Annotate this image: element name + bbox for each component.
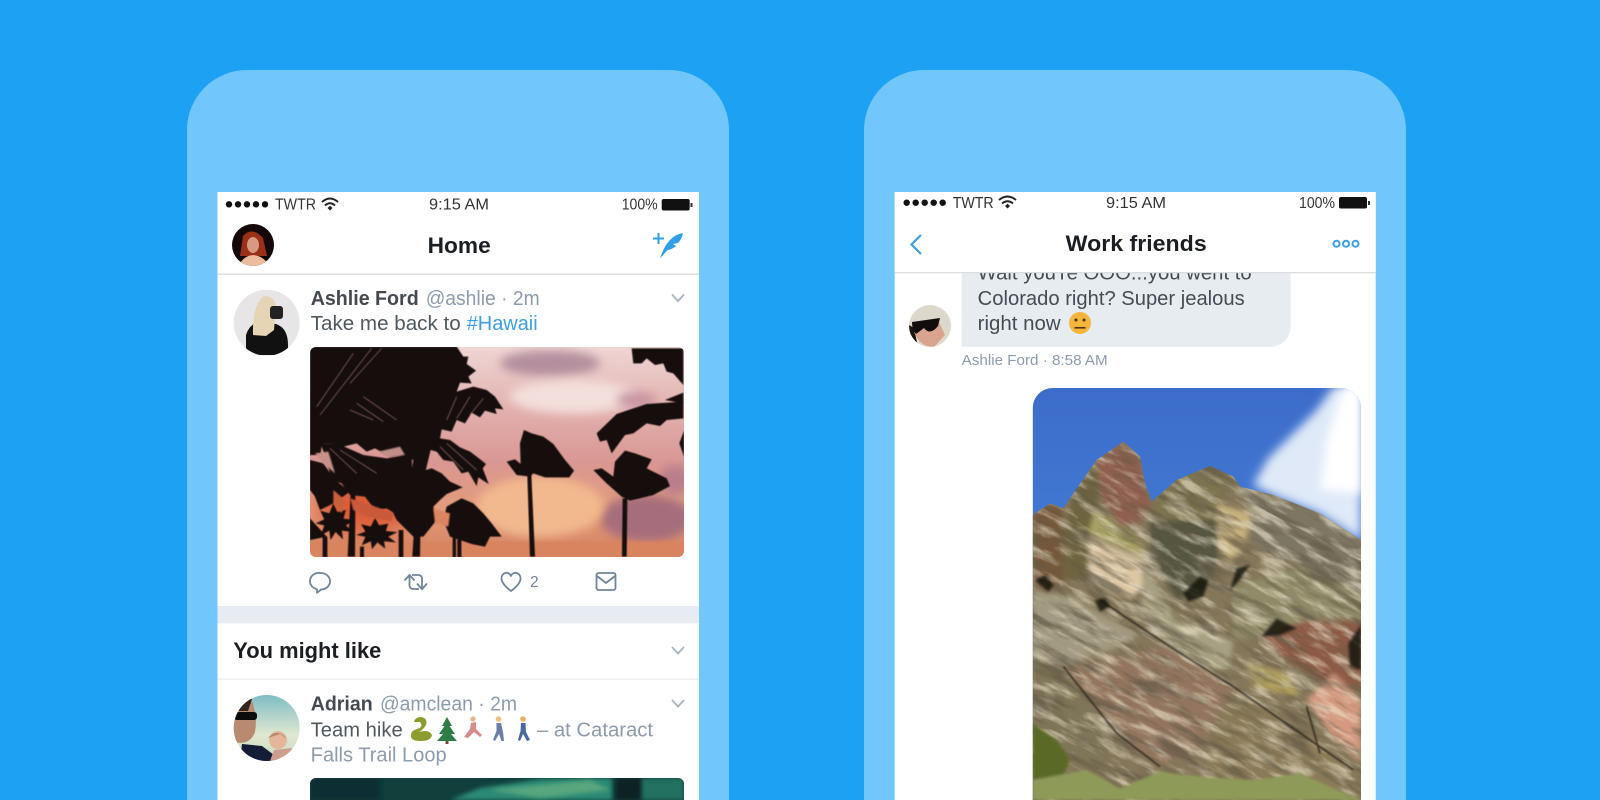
status and navigation bar: 9:15 AM <box>1106 195 1166 212</box>
status bar left <box>226 196 693 214</box>
message bubble: Colorado right? Super jealous <box>978 288 1245 310</box>
icon: compose feather <box>653 233 683 258</box>
phone: home timeline <box>187 70 729 800</box>
icon: more options <box>1334 241 1358 247</box>
status bar left: TWTR <box>275 196 316 214</box>
screen right <box>895 192 1376 800</box>
avatar: Ashlie with sunglasses <box>909 305 951 347</box>
tweet: Adrian: @amclean · 2m <box>380 694 517 716</box>
phone: group direct message <box>864 70 1406 800</box>
message timestamp: Ashlie Ford · 8:58 AM <box>962 353 1108 369</box>
photo: rock formation <box>1033 387 1361 800</box>
icon: direct message <box>596 573 616 590</box>
message bubble: right now <box>978 313 1061 335</box>
status bar left: 9:15 AM <box>429 196 489 214</box>
heading: You might like: You might like <box>233 638 381 663</box>
icon: chevron <box>672 647 684 654</box>
emoji row <box>411 716 530 744</box>
phone frame left <box>187 70 729 800</box>
action icons <box>310 573 616 593</box>
tweet: Ashlie Ford: #Hawaii <box>467 313 538 335</box>
avatar: Adrian <box>233 695 300 761</box>
message bubble: Wait you're OOO...you went to <box>978 262 1252 284</box>
tweet: Ashlie Ford <box>233 288 693 593</box>
status and navigation bar: TWTR <box>953 195 994 212</box>
photo: forest <box>310 778 684 800</box>
message bubble <box>962 262 1291 347</box>
status bar left: 100% <box>622 196 658 214</box>
tweet: Adrian <box>233 694 684 800</box>
status and navigation bar <box>895 192 1376 273</box>
title: Home: Home <box>428 233 491 258</box>
tweet: Adrian: Falls Trail Loop <box>311 745 447 767</box>
icon: heart <box>502 573 520 591</box>
avatar: Ashlie <box>233 289 300 357</box>
tweet: Adrian: – at Cataract <box>537 720 653 742</box>
screen left <box>218 192 699 800</box>
icon: chevron <box>672 294 684 301</box>
icon: chevron <box>672 700 684 706</box>
tweet: Ashlie Ford: Ashlie Ford <box>311 288 419 310</box>
icon: retweet <box>404 575 427 589</box>
tweet: Ashlie Ford: Take me back to <box>311 313 461 335</box>
status and navigation bar: 100% <box>1299 195 1335 212</box>
phone frame right <box>864 70 1406 800</box>
tweet: Ashlie Ford: 2 <box>530 574 539 591</box>
tweet: Ashlie Ford: @ashlie · 2m <box>426 288 540 310</box>
icon: reply <box>310 573 330 593</box>
tweet: Adrian: Adrian <box>311 694 373 716</box>
title: Work friends: Work friends <box>1066 231 1207 256</box>
tweet: Adrian: Team hike <box>311 720 403 742</box>
icon: profile avatar <box>232 224 274 268</box>
photo: palm trees at sunset <box>310 347 693 558</box>
section separator <box>218 606 699 623</box>
emoji: neutral face <box>1069 312 1091 334</box>
icon: back chevron <box>912 235 921 254</box>
